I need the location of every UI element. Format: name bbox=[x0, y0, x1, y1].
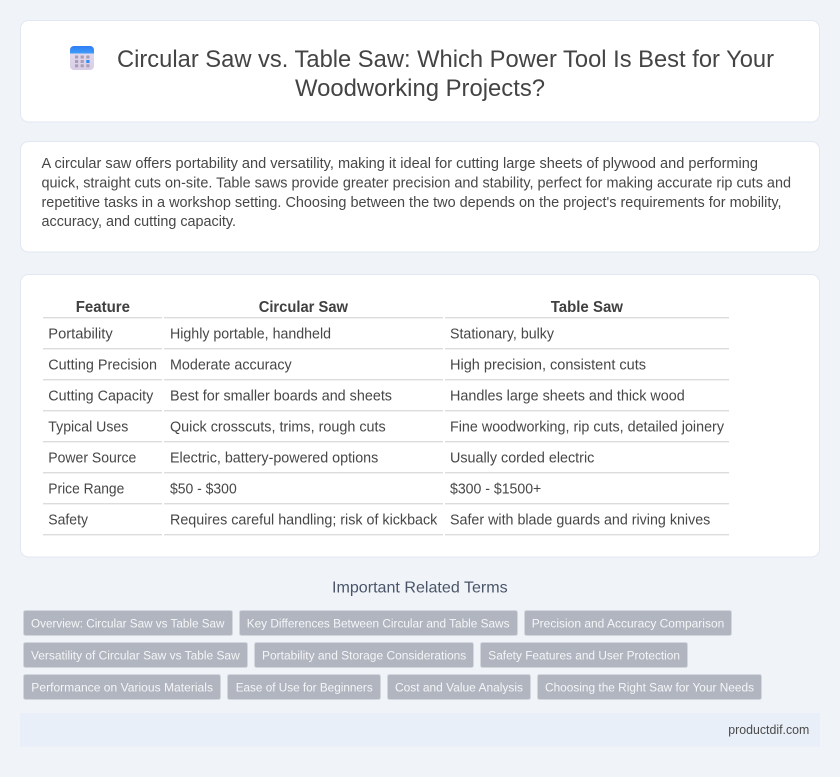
tag: versatility bbox=[24, 642, 248, 668]
tag: overview: Overview: Circular Saw vs Table Saw bbox=[31, 616, 225, 630]
panel: comparison table bbox=[20, 274, 820, 557]
tag: choosing: Choosing the Right Saw for Your Needs bbox=[545, 680, 754, 694]
tag: cost bbox=[388, 674, 530, 700]
heading: important related terms: Important Related Terms bbox=[332, 580, 508, 597]
row: cutting precision: High precision, consistent cuts bbox=[450, 358, 646, 374]
tag: safety: Safety Features and User Protection bbox=[488, 648, 680, 662]
tag: portability bbox=[254, 642, 474, 668]
related terms tags bbox=[24, 610, 762, 700]
tag: cost: Cost and Value Analysis bbox=[395, 680, 523, 694]
row: portability: Portability bbox=[48, 326, 114, 342]
table header: Circular Saw bbox=[259, 299, 349, 316]
intro paragraph: accuracy, and cutting capacity. bbox=[42, 214, 236, 230]
tag: precision: Precision and Accuracy Comparison bbox=[532, 616, 724, 630]
row: typical uses: Quick crosscuts, trims, rough cuts bbox=[170, 420, 386, 436]
tag: performance bbox=[24, 674, 220, 700]
row: typical uses: Typical Uses bbox=[48, 420, 128, 436]
row: safety: Safer with blade guards and riving knives bbox=[450, 512, 710, 528]
table header: Table Saw bbox=[551, 299, 624, 316]
intro paragraph: quick, straight cuts on-site. Table saws provide greater precision and stability, perfect for making accurate rip cuts and bbox=[42, 176, 791, 192]
row: price range: $300 - $1500+ bbox=[450, 482, 541, 498]
icon: calendar bbox=[70, 46, 94, 70]
tag: precision bbox=[524, 610, 732, 636]
row: portability: Highly portable, handheld bbox=[170, 326, 331, 342]
title: Woodworking Projects? bbox=[295, 75, 545, 102]
tag: performance: Performance on Various Materials bbox=[31, 680, 213, 694]
footer source text: productdif.com bbox=[728, 722, 809, 737]
row: safety bbox=[48, 512, 710, 528]
row: price range: $50 - $300 bbox=[170, 482, 237, 498]
row: safety: Requires careful handling; risk of kickback bbox=[170, 512, 438, 528]
title: Circular Saw vs. Table Saw: Which Power Tool Is Best for Your bbox=[117, 46, 774, 73]
intro paragraph: A circular saw offers portability and versatility, making it ideal for cutting large sheets of plywood and performing bbox=[42, 156, 758, 172]
title card bbox=[20, 20, 820, 122]
tag: key differences: Key Differences Between Circular and Table Saws bbox=[247, 616, 509, 630]
tag: ease of use bbox=[228, 674, 380, 700]
tag: ease of use: Ease of Use for Beginners bbox=[236, 680, 373, 694]
footer bbox=[20, 713, 820, 747]
row: safety: Safety bbox=[48, 512, 89, 528]
row: cutting capacity: Best for smaller boards and sheets bbox=[170, 388, 392, 404]
intro paragraph bbox=[42, 156, 791, 230]
row: cutting capacity bbox=[48, 388, 685, 404]
tag: versatility: Versatility of Circular Saw vs Table Saw bbox=[31, 648, 240, 662]
row: price range: Price Range bbox=[48, 482, 124, 498]
row: portability bbox=[48, 326, 555, 342]
row: cutting capacity: Cutting Capacity bbox=[48, 388, 154, 404]
intro paragraph: repetitive tasks in a workshop setting. Choosing between the two depends on the project's requirements for mobility, bbox=[42, 195, 782, 211]
row: power source: Electric, battery-powered options bbox=[170, 450, 378, 466]
title bbox=[117, 46, 774, 102]
row: cutting precision bbox=[48, 358, 646, 374]
tag: portability: Portability and Storage Considerations bbox=[262, 648, 466, 662]
panel: intro text bbox=[20, 142, 820, 252]
row: typical uses: Fine woodworking, rip cuts, detailed joinery bbox=[450, 420, 725, 436]
row: portability: Stationary, bulky bbox=[450, 326, 555, 342]
tag: safety bbox=[480, 642, 688, 668]
row: power source: Power Source bbox=[48, 450, 136, 466]
tag: choosing bbox=[538, 674, 762, 700]
row: cutting precision: Moderate accuracy bbox=[170, 358, 292, 374]
row: price range bbox=[48, 482, 541, 498]
table header bbox=[76, 299, 624, 316]
row: typical uses bbox=[48, 420, 725, 436]
row: cutting precision: Cutting Precision bbox=[48, 358, 157, 374]
tag: overview bbox=[24, 610, 232, 636]
table header: Feature bbox=[76, 299, 130, 316]
row: power source bbox=[48, 450, 594, 466]
row: cutting capacity: Handles large sheets and thick wood bbox=[450, 388, 685, 404]
tag: key differences bbox=[240, 610, 518, 636]
row: power source: Usually corded electric bbox=[450, 450, 594, 466]
